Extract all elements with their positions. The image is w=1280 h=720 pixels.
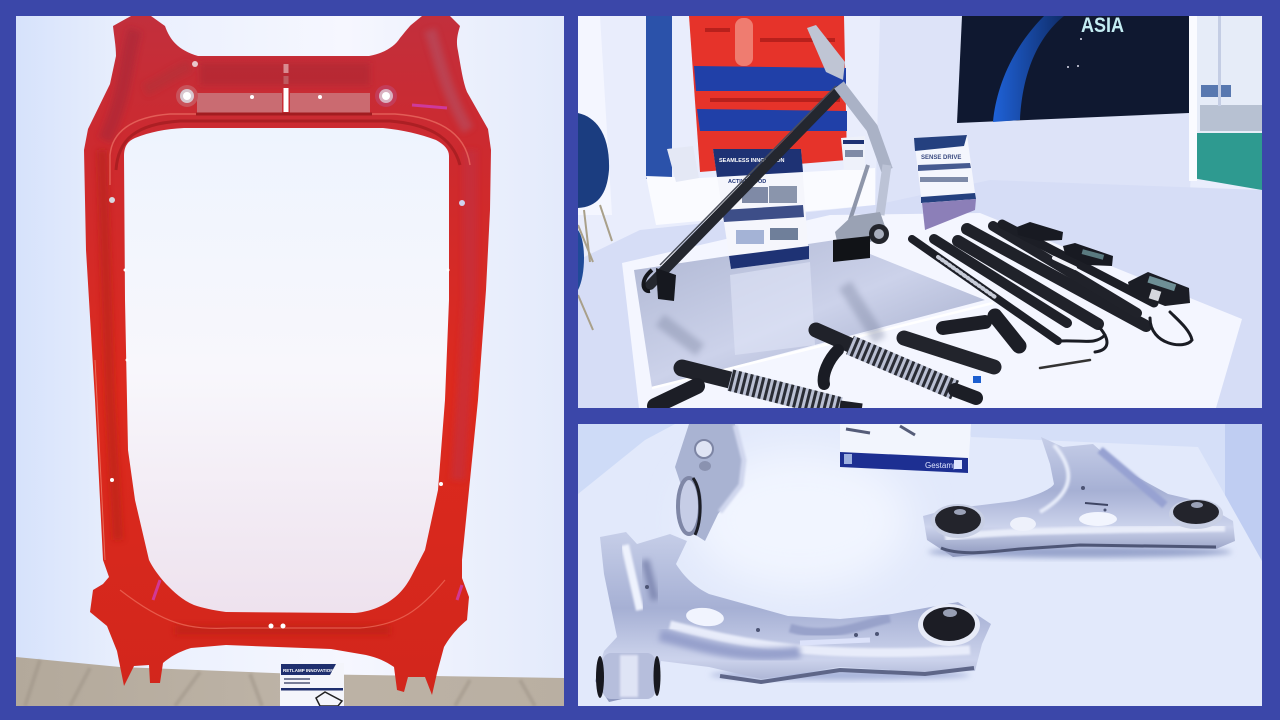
upright bracket with ball joint <box>675 424 744 541</box>
wall <box>16 16 564 706</box>
group of electric tailgate actuators <box>912 224 1192 368</box>
Gestamp sign <box>840 424 971 473</box>
Gestamp sign: Gestamp <box>925 461 958 470</box>
side mirror sign: active hood: SEAMLESS INNOVATION <box>719 158 785 164</box>
panel: red body frame on wall <box>16 16 564 706</box>
panel: actuators on exhibition stand <box>578 14 1262 408</box>
small card on plinth <box>667 146 699 182</box>
centre stamped band <box>197 93 282 113</box>
white table <box>578 424 1262 706</box>
spring actuator right <box>816 330 981 398</box>
panel: aluminium control arms <box>578 424 1262 706</box>
dark screen with earth and ASIA: ASIA <box>1081 14 1124 37</box>
bushing left <box>931 504 985 538</box>
side mirror sign: active hood <box>713 149 809 269</box>
right sign: SENSE DRIVE <box>921 155 961 161</box>
white wall shading <box>578 16 1200 225</box>
floor <box>578 180 1262 408</box>
adjacent booth with teal floor <box>1189 16 1262 190</box>
right background wall <box>968 424 1262 561</box>
cylindrical rear bushing <box>596 653 660 699</box>
lower control arm, right <box>923 437 1235 558</box>
spring actuator front <box>655 368 862 408</box>
dark screen with earth and ASIA <box>957 14 1207 123</box>
wooden floor <box>16 657 564 706</box>
front bushing <box>918 604 980 646</box>
control modules <box>1017 222 1190 306</box>
tall strut actuator with bracket <box>644 25 889 301</box>
white display table <box>622 213 1242 408</box>
left background wall <box>578 424 675 494</box>
booth wall <box>578 16 1262 257</box>
window opening in frame <box>124 203 449 613</box>
handle actuator <box>943 316 1019 346</box>
mounting holes <box>109 61 465 628</box>
bushing right <box>1169 499 1223 529</box>
side mirror sign: active hood: ACTIVE HOOD <box>728 179 766 185</box>
blue chair <box>578 113 612 330</box>
table lighting <box>703 454 904 586</box>
red body frame <box>84 16 491 695</box>
information card on floor: RETLAMP INNOVATION <box>283 668 334 673</box>
inner rail highlights <box>110 114 470 185</box>
glass top <box>634 240 993 388</box>
blue column <box>646 16 672 179</box>
small rear sign <box>841 136 865 170</box>
information card on floor <box>280 663 344 706</box>
white plinth <box>646 168 875 225</box>
right sign <box>914 135 976 230</box>
black cylinder <box>904 338 994 367</box>
red and blue door panel <box>689 16 847 172</box>
magenta reflections <box>153 105 462 600</box>
reflection of strut in glass <box>660 285 880 350</box>
frame shading: darker upper corners <box>102 30 470 630</box>
lower control arm, front <box>595 532 991 702</box>
